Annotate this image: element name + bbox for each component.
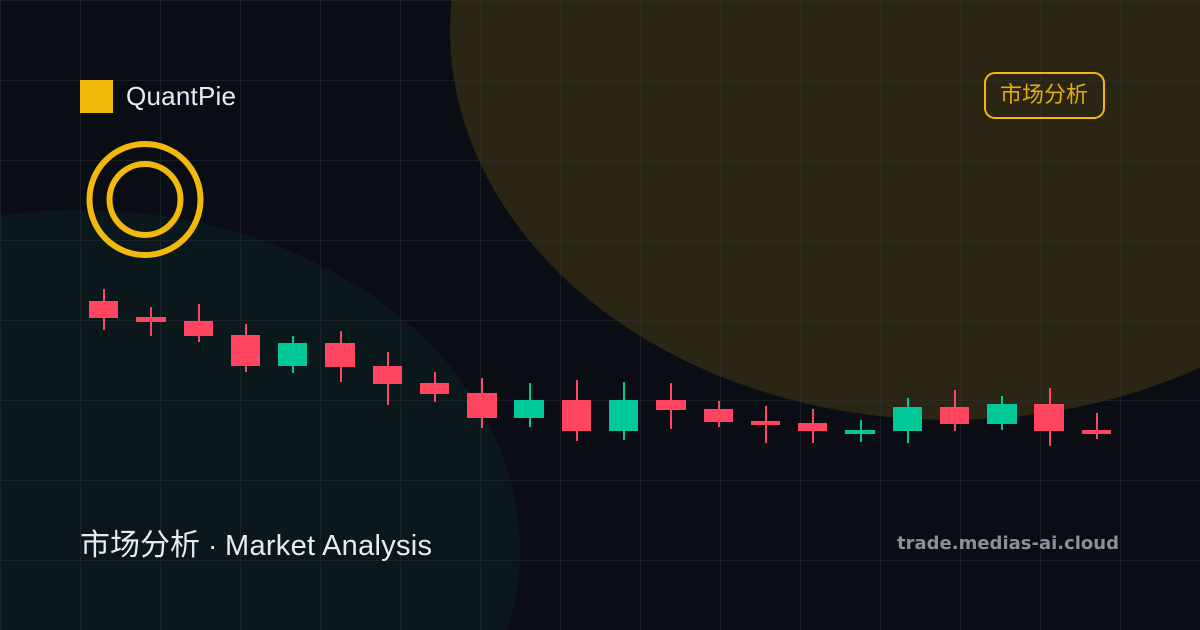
title: Market Analysis [225,530,432,562]
tag: market analysis [985,73,1104,118]
candle 2 [136,307,166,336]
background shape: teal ellipse [0,210,520,630]
candle 21 [1034,388,1064,446]
icon: concentric rings [90,144,200,255]
candle 17 [845,420,875,442]
website url: trade.medias-ai.cloud [897,533,1119,554]
title: 市场分析 [80,529,200,562]
candle 4 [231,324,260,372]
candle 6 [325,331,355,382]
candlestick chart [89,289,1111,446]
candle 19 [940,390,969,431]
candle 3 [184,304,213,342]
icon: logo square [80,80,113,113]
candle 14 [704,401,733,427]
logo [80,80,236,113]
candle 9 [467,378,497,428]
candle 13 [656,383,686,429]
candle 18 [893,398,922,443]
candle 16 [798,409,827,443]
candle 7 [373,352,402,405]
candle 1 [89,289,118,330]
tag: market analysis: 市场分析 [1000,82,1088,107]
brand name: QuantPie [126,81,236,111]
candle 5 [278,336,307,373]
candle 10 [514,383,544,427]
candle 12 [609,382,638,440]
candle 15 [751,406,780,443]
candle 8 [420,372,449,402]
title: · [208,530,217,561]
candle 20 [987,396,1017,430]
title [80,529,432,562]
candle 22 [1082,413,1111,439]
candle 11 [562,380,591,441]
background shape: gold ellipse [450,0,1200,420]
